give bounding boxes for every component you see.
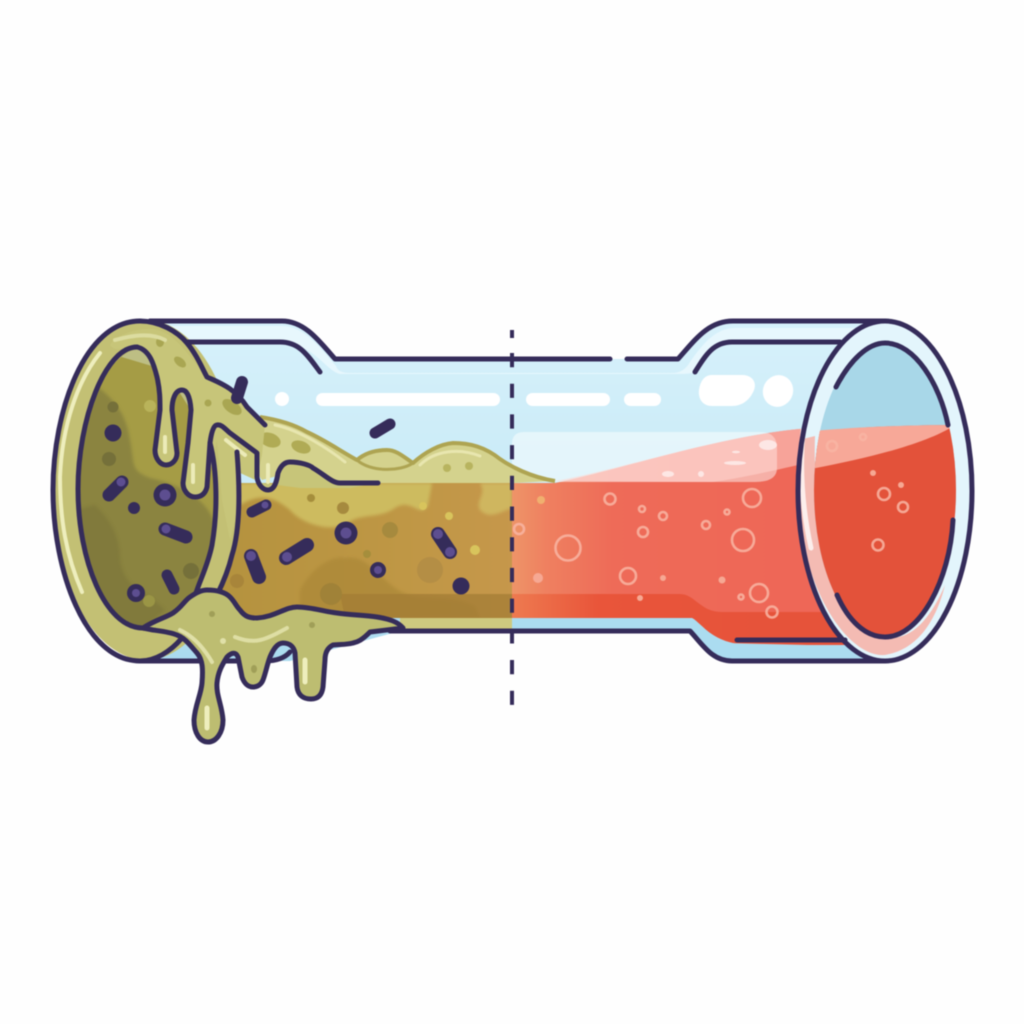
water surface lens: [555, 428, 810, 482]
sludge-filled opening: [80, 350, 214, 626]
clean water: red liquid: [512, 428, 850, 661]
bottom wall inner right: [737, 638, 845, 642]
bottom slime spill: [143, 590, 403, 742]
slime under-strip: [400, 618, 512, 631]
top slime overflow with drips: [110, 329, 378, 540]
bottom wall left: [140, 652, 290, 661]
inner line right: [695, 342, 840, 372]
bubble dots: [533, 470, 904, 601]
contaminant particles: [104, 382, 470, 602]
sludge body: [200, 483, 512, 631]
top wall left: [150, 321, 610, 359]
mouth opening: [813, 345, 957, 636]
slime highlights: [180, 630, 212, 662]
left ring outlines and highlight: [53, 321, 378, 661]
slime crust on top of sludge: [240, 405, 555, 483]
pink tint on lower rim: [798, 436, 945, 655]
pale glossy reflection band: [512, 432, 777, 482]
light sludge layer: [225, 483, 432, 527]
right mouth inner arcs: [836, 343, 948, 425]
white rim highlight: [802, 430, 811, 548]
particle behind slime: [237, 382, 242, 398]
pipe glass body: [140, 321, 885, 661]
illustration: pipe with sludge and clean flow: [50, 318, 976, 746]
bottom wall: [390, 631, 885, 661]
inner line left: [187, 342, 320, 372]
top wall right: [627, 321, 885, 359]
left slime ring: [53, 320, 239, 660]
right pipe mouth: [798, 321, 972, 661]
specular highlights: [275, 370, 798, 412]
glass outlines: [140, 321, 972, 661]
bubbles: [514, 434, 908, 618]
darker lower layer: [302, 558, 403, 611]
slime flecks: [156, 337, 164, 347]
mouth rim: [798, 321, 972, 661]
glints on surface: [662, 440, 777, 477]
right mouth outer ellipse: [798, 321, 972, 661]
drip highlights: [165, 437, 268, 482]
dashed divider: [510, 330, 514, 705]
